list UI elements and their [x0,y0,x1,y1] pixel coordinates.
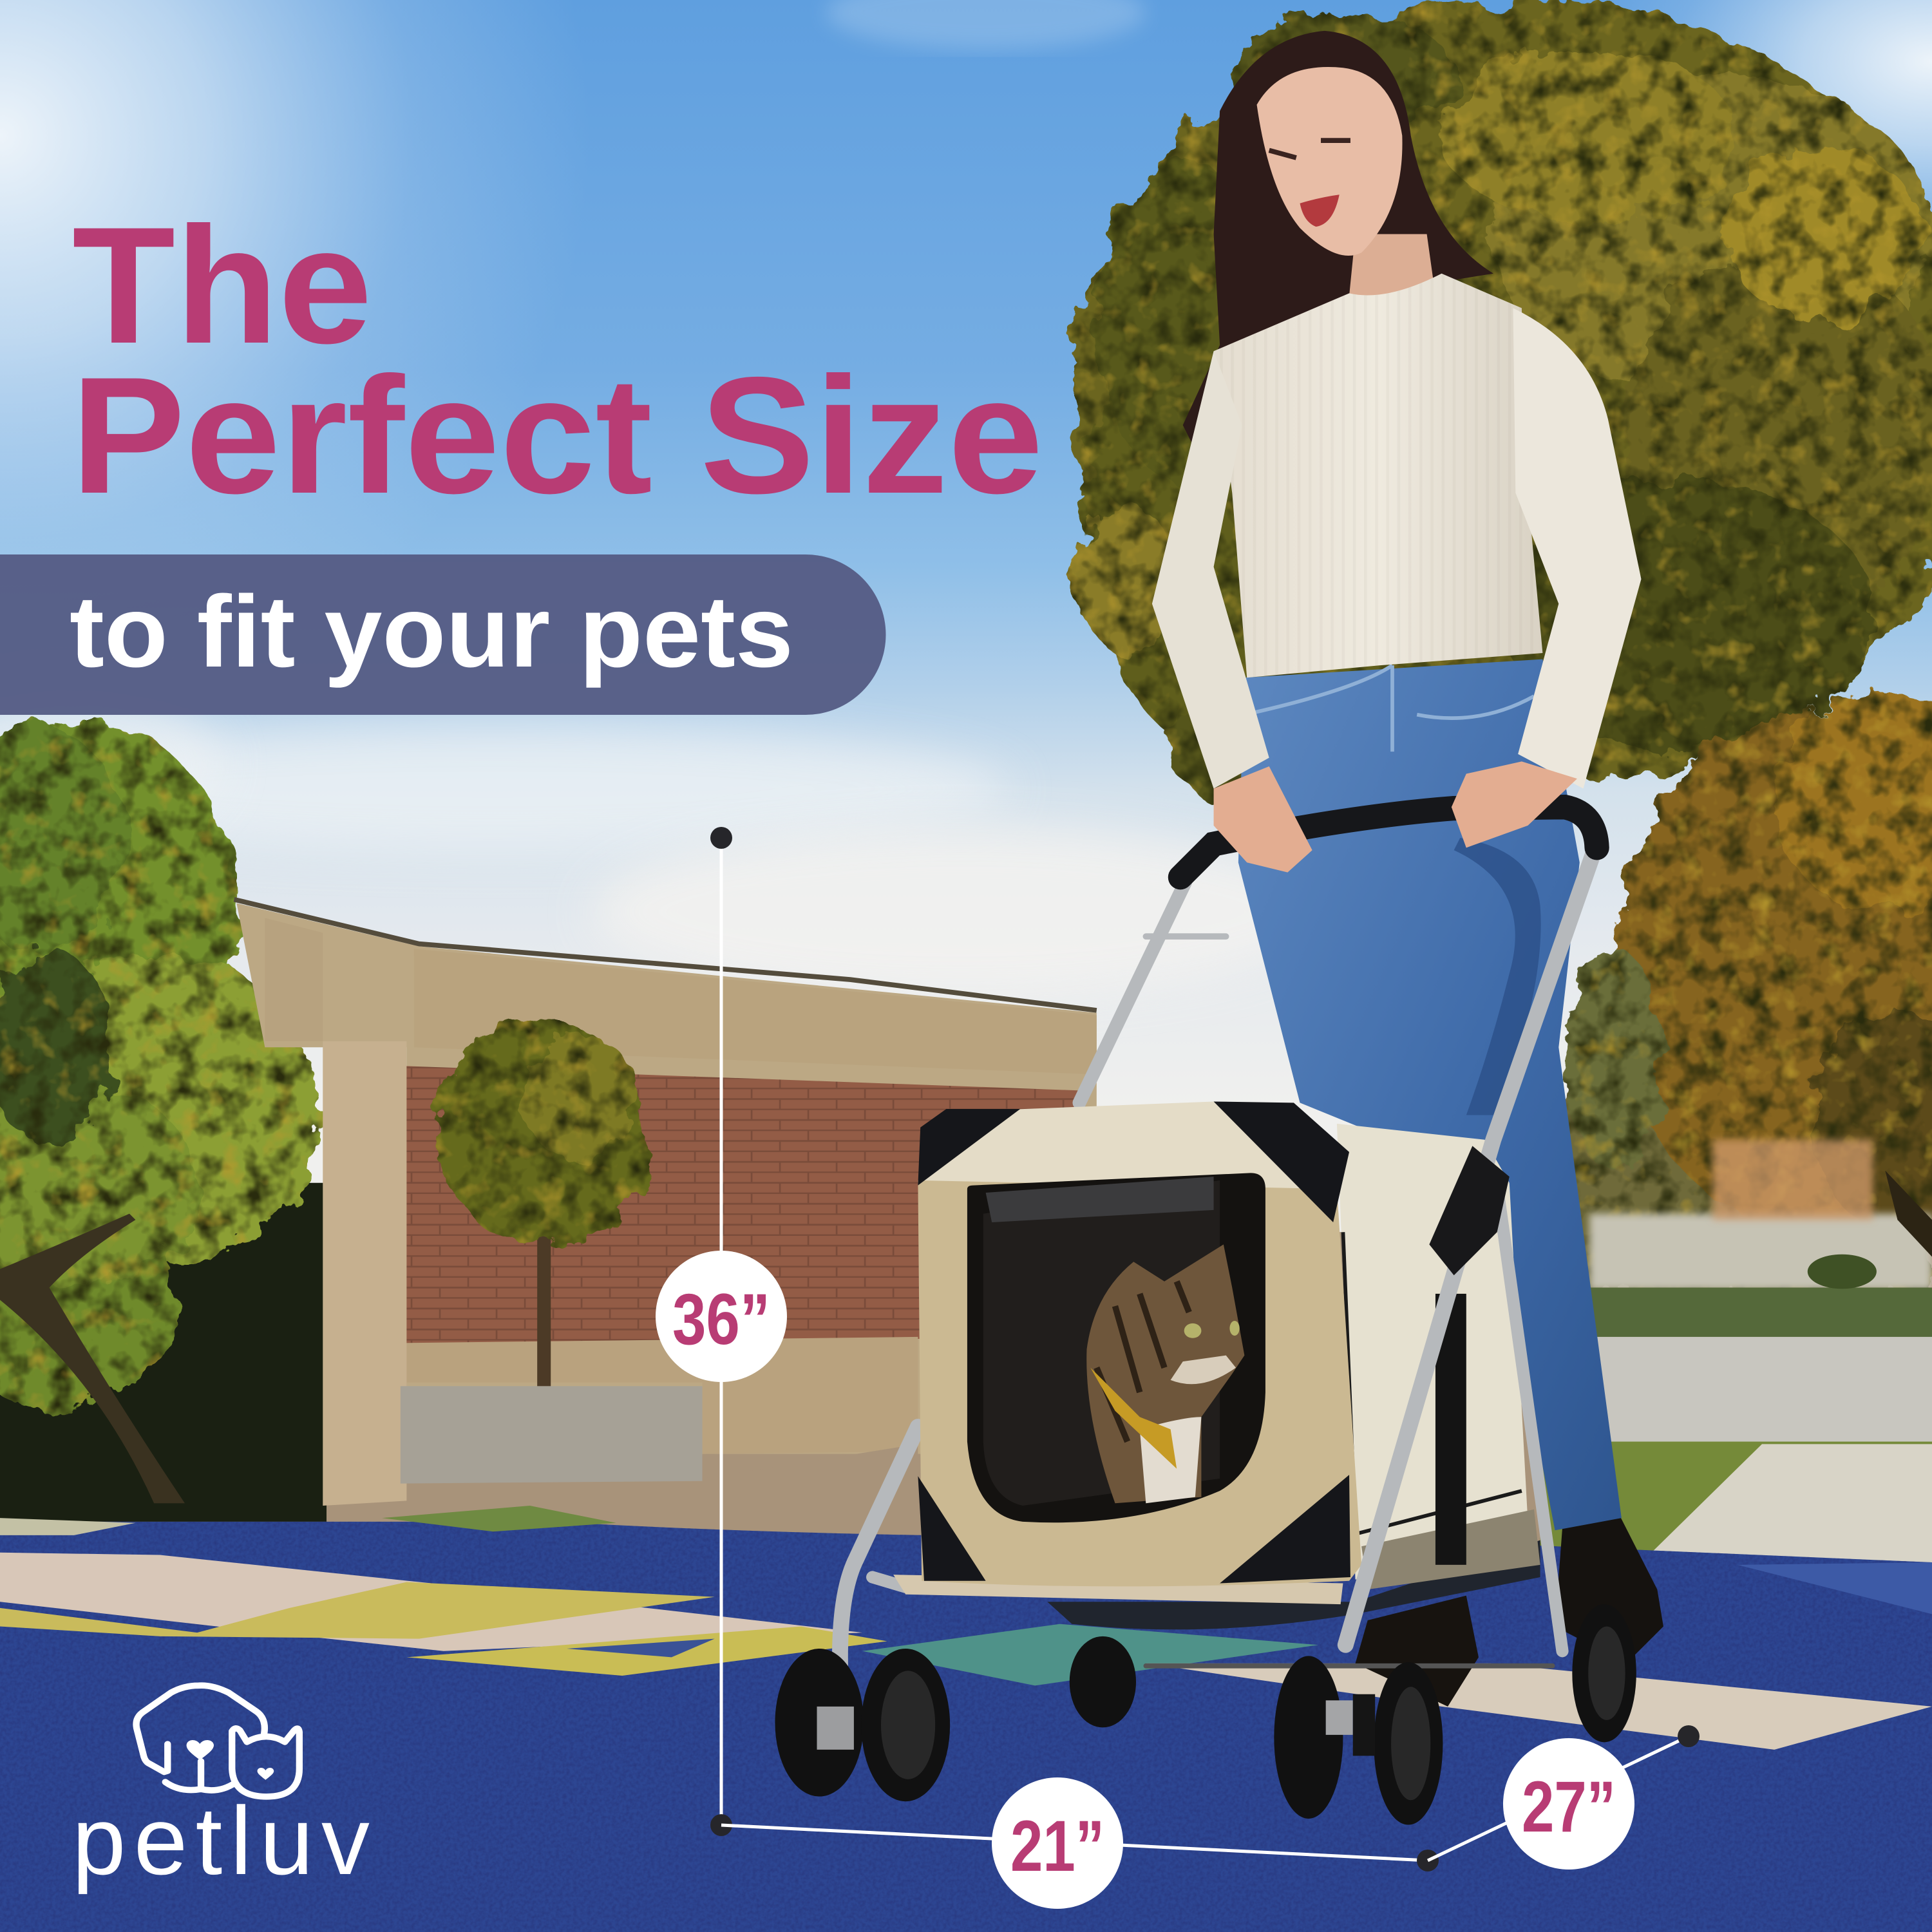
left green tree [0,721,327,1522]
sweater torso [1214,274,1542,677]
brick wall building [234,900,1097,1506]
jeans [1238,659,1622,1530]
person [1152,31,1663,1707]
carrier side panel [1337,1124,1540,1589]
mesh window [967,1173,1265,1522]
rear frame tubes [840,882,1553,1676]
cat [1086,1244,1244,1503]
neck and face [1257,67,1435,296]
petluv logo [72,1685,370,1895]
carrier front panel [918,1180,1361,1586]
blue ground [0,1522,1932,1932]
distant park, right [1540,1140,1932,1577]
small round tree [439,1020,646,1386]
black corner patches [918,1101,1350,1584]
sweater left arm [1152,351,1269,788]
under-seat shadow [1047,1540,1540,1629]
gravel bed [345,1444,918,1540]
carrier top panel [918,1101,1337,1189]
subtitle text: to fit your pets [70,575,793,688]
seat tray [893,1575,1343,1604]
headline [71,192,1043,528]
dimension: height 36 inch: 36” [672,1279,770,1359]
hands on the handle [1214,761,1577,873]
hair back [1183,31,1493,475]
front frame tubes [1345,850,1595,1651]
stroller [775,807,1636,1825]
headline line 1: The [72,192,372,378]
window mesh panel [983,1180,1220,1506]
dimension: width 21 inch [721,1777,1439,1909]
concrete planter [401,1386,703,1484]
window top zip flap [986,1177,1214,1222]
boots [1356,1510,1663,1707]
side pocket strap [1435,1294,1466,1565]
dimension: height 36 inch [656,827,787,1836]
dimension: width 21 inch: 21” [1010,1806,1104,1886]
wheels [775,1604,1636,1825]
painted ground pattern [0,1506,1932,1750]
sky [0,0,1932,1232]
fold latch [1429,1146,1510,1275]
rear autumn tree, far right [1565,690,1932,1294]
wordmark: petluv [72,1786,370,1895]
sweater right arm [1513,308,1641,788]
ground backing [0,1232,1932,1602]
large autumn tree, right [1072,0,1932,801]
headline line 2: Perfect Size [71,342,1043,528]
dimension: depth 27 inch [1428,1725,1700,1870]
handle bar [1180,807,1597,877]
subtitle banner [0,554,886,715]
icon: dog and cat [137,1685,299,1797]
dimension: depth 27 inch: 27” [1522,1766,1616,1847]
